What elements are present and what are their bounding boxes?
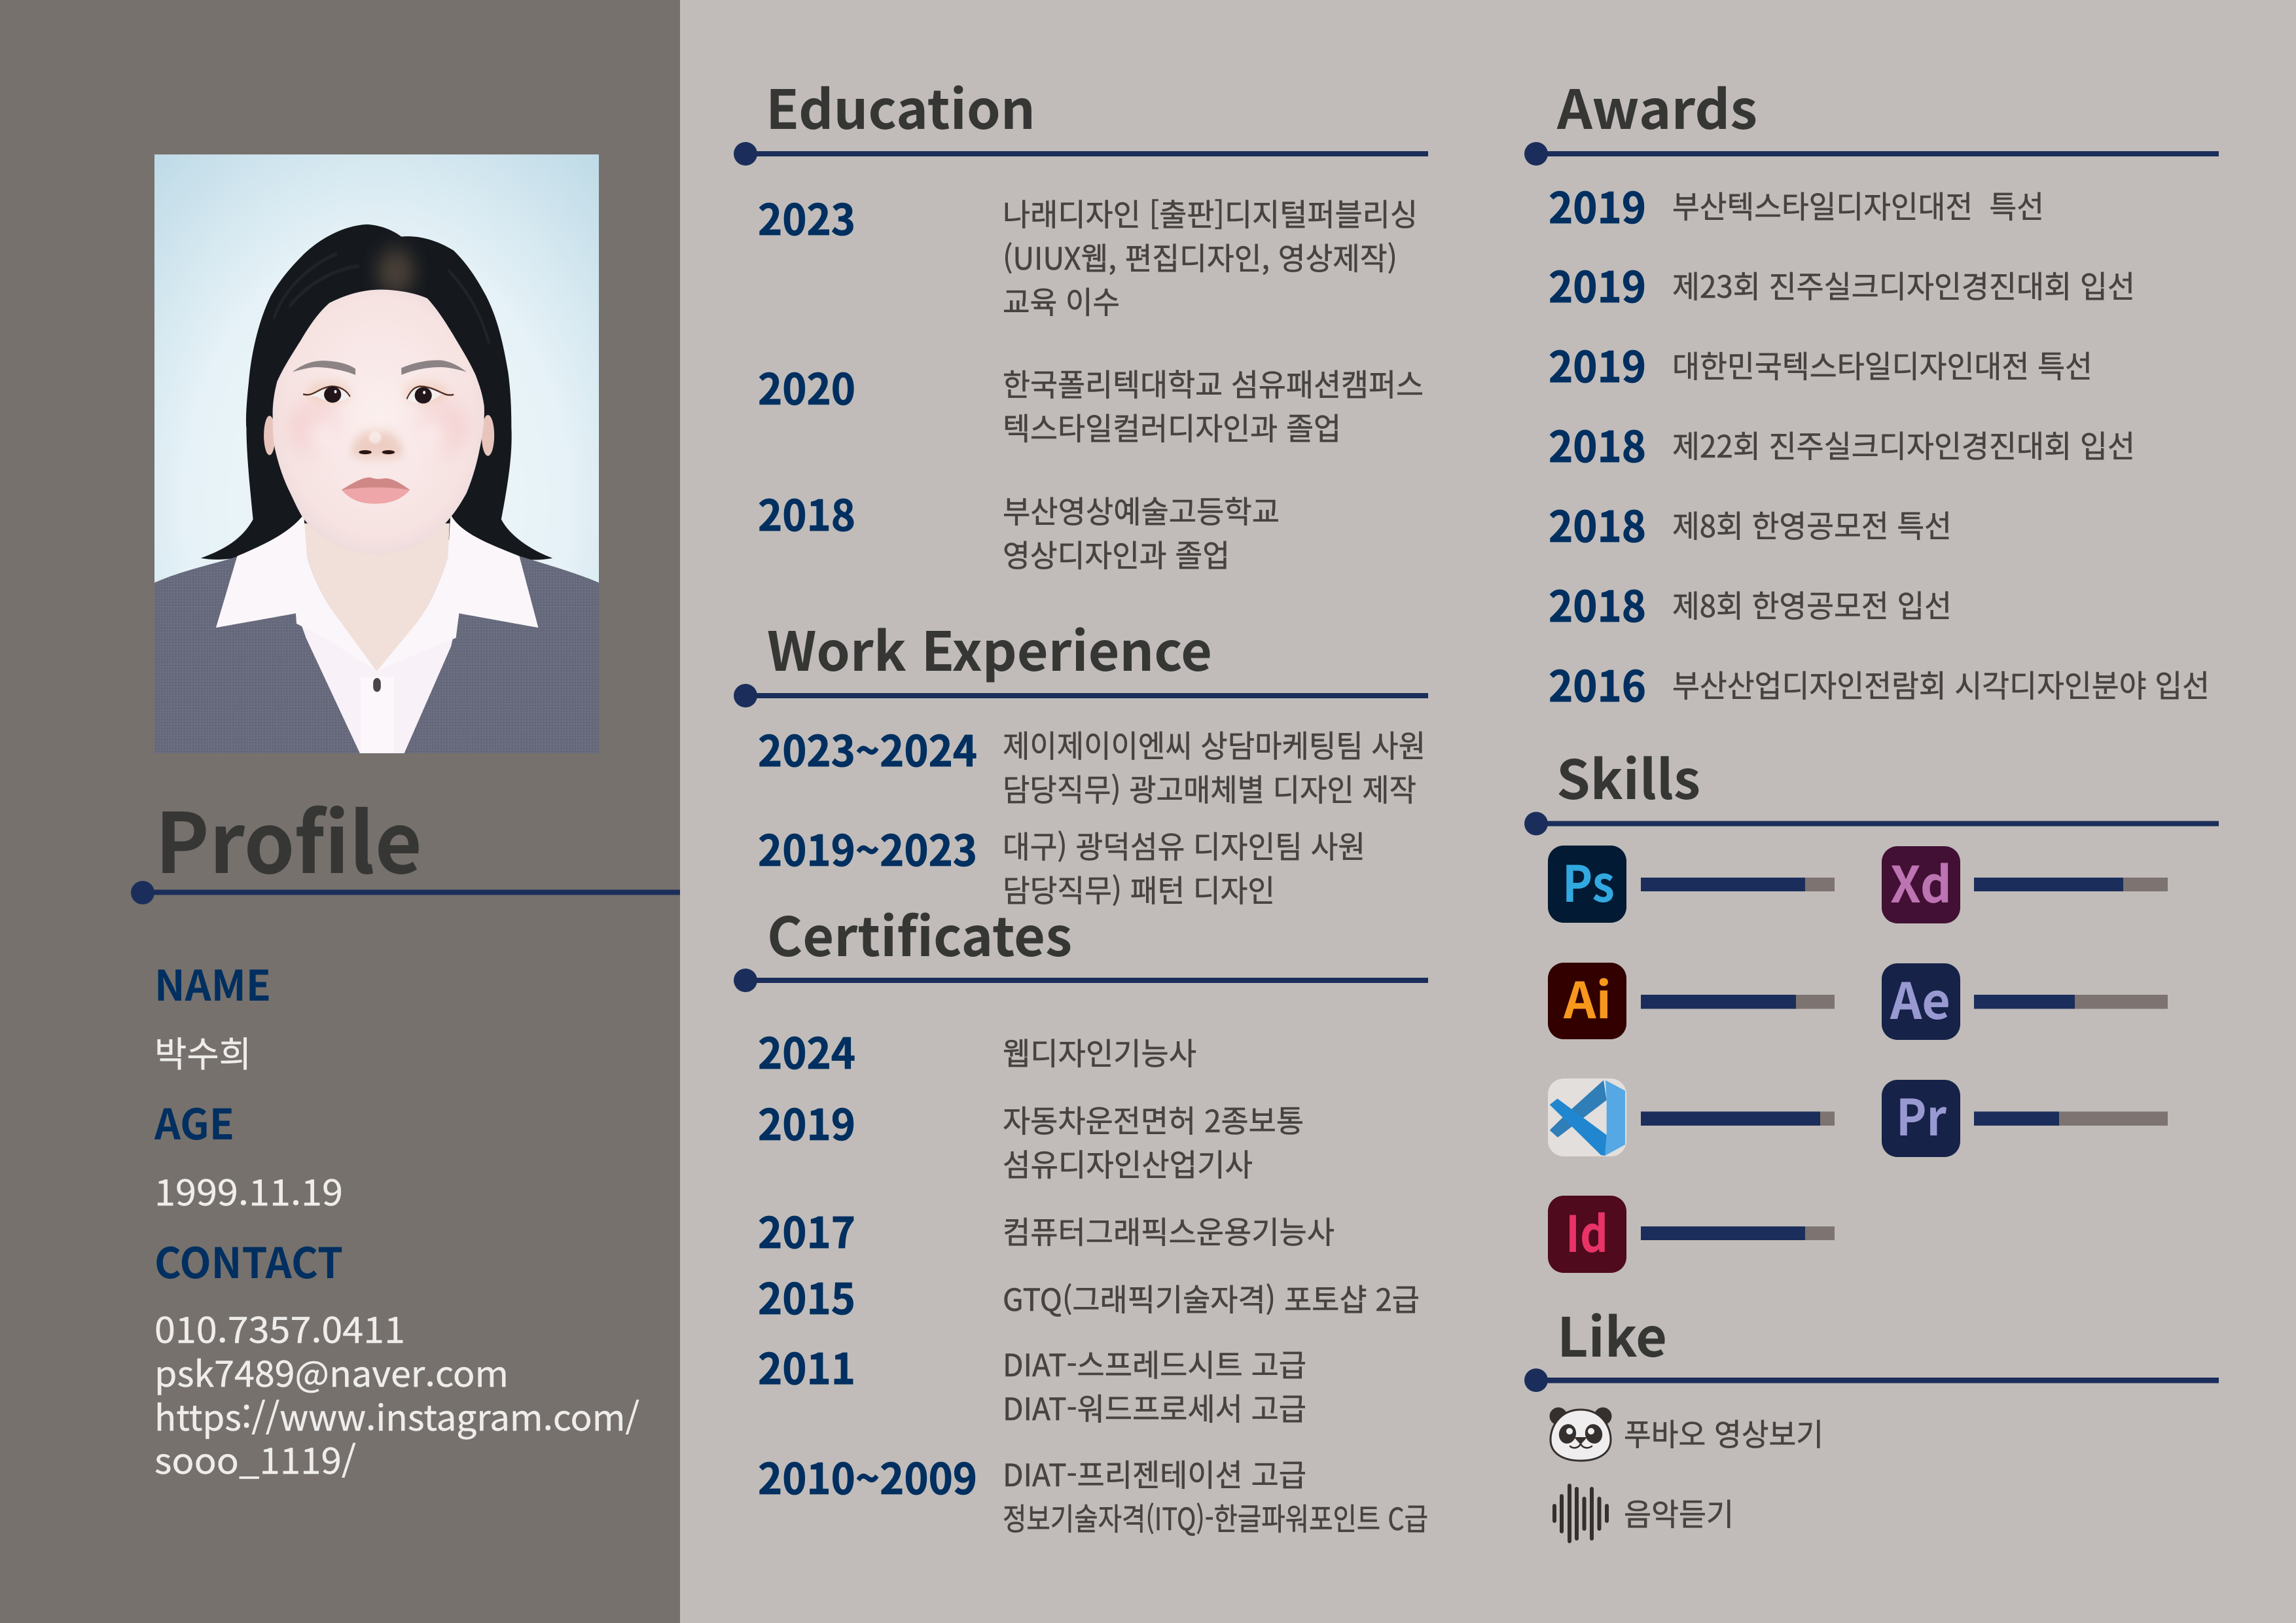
education entry 2023 (758, 186, 1418, 323)
award row 6: 제8회 한영공모전 입선 (1672, 581, 1952, 626)
awards heading: Awards (1556, 67, 1757, 145)
award row 6: 2018 (1549, 573, 1646, 634)
award row 4: 2018 (1549, 413, 1646, 474)
profile divider (131, 881, 680, 904)
like item: fubao videos: 푸바오 영상보기 (1624, 1410, 1823, 1455)
skill: Premiere: Pr (1896, 1078, 1947, 1150)
education entry 2020: 2020 (758, 355, 855, 417)
certificate 2010-2009: 2010~2009 (758, 1445, 977, 1507)
skill: Illustrator: Ai (1563, 961, 1611, 1033)
certificate 2024: 2024 (758, 1020, 855, 1081)
education heading: Education (766, 67, 1035, 145)
certificates heading: Certificates (767, 894, 1072, 972)
award row 2 (1549, 253, 2135, 315)
skills divider (1524, 812, 2219, 835)
certificate 2017 (758, 1199, 1335, 1260)
education entry 2023: 교육 이수 (1003, 277, 1120, 323)
award row 5: 제8회 한영공모전 특선 (1672, 501, 1952, 546)
education entry 2018 (758, 482, 1280, 576)
portrait photo (154, 154, 599, 753)
skills heading: Skills (1556, 737, 1700, 815)
contact details (154, 1302, 639, 1484)
work entry 2023-2024: 제이제이이엔씨 상담마케팅팀 사원 (1003, 721, 1426, 766)
certificate 2019 (758, 1091, 1304, 1185)
education entry 2023: 나래디자인 [출판]디지털퍼블리싱 (1003, 190, 1418, 235)
education entry 2018: 영상디자인과 졸업 (1003, 531, 1230, 576)
panel: skills (1524, 737, 2219, 1273)
award row 7: 2016 (1549, 652, 1646, 714)
certificate 2017: 컴퓨터그래픽스운용기능사 (1003, 1207, 1335, 1253)
certificate 2010-2009: 정보기술자격(ITQ)-한글파워포인트 C급 (1003, 1494, 1428, 1539)
work experience heading: Work Experience (767, 609, 1212, 687)
award row 1: 2019 (1549, 174, 1646, 236)
contact details: https://www.instagram.com/ (154, 1389, 639, 1441)
skill: After Effects: Ae (1890, 961, 1950, 1033)
certificate 2015: 2015 (758, 1265, 855, 1327)
age label: AGE (154, 1092, 234, 1152)
skill: Photoshop: Ps (1562, 844, 1615, 916)
name value: 박수희 (154, 1026, 251, 1077)
certificate 2011 (758, 1335, 1306, 1429)
work entry 2023-2024 (758, 717, 1426, 810)
award row 1 (1549, 174, 2044, 236)
work entry 2023-2024: 담당직무) 광고매체별 디자인 제작 (1003, 765, 1416, 810)
education entry 2023: (UIUX웹, 편집디자인, 영상제작) (1003, 234, 1397, 279)
profile heading: Profile (155, 777, 422, 897)
work entry 2019-2023: 담당직무) 패턴 디자인 (1003, 866, 1275, 911)
contact details: psk7489@naver.com (154, 1346, 509, 1397)
certificate 2019: 섬유디자인산업기사 (1003, 1140, 1253, 1185)
age value: 1999.11.19 (154, 1164, 343, 1216)
work entry 2023-2024: 2023~2024 (758, 717, 977, 779)
like heading: Like (1557, 1294, 1667, 1372)
education entry 2018: 2018 (758, 482, 855, 543)
skill: Premiere (1882, 1078, 2168, 1157)
award row 3: 2019 (1549, 333, 1646, 395)
contact details: 010.7357.0411 (154, 1302, 405, 1353)
work entry 2019-2023: 대구) 광덕섬유 디자인팀 사원 (1003, 822, 1365, 867)
award row 5 (1549, 493, 1952, 554)
panel: work experience (734, 609, 1428, 911)
certificate 2010-2009 (758, 1445, 1428, 1539)
education divider (734, 142, 1428, 166)
panel: awards (1524, 67, 2219, 714)
contact details: sooo_1119/ (154, 1433, 356, 1484)
panel: like (1524, 1294, 2219, 1543)
awards divider (1524, 142, 2219, 166)
skill: Illustrator (1548, 961, 1835, 1039)
education entry 2018: 부산영상예술고등학교 (1003, 487, 1280, 532)
certificate 2011: DIAT-워드프로세서 고급 (1003, 1384, 1306, 1429)
skill: Adobe XD: Xd (1890, 845, 1952, 917)
certificate 2011: DIAT-스프레드시트 고급 (1003, 1340, 1306, 1385)
education entry 2020: 한국폴리텍대학교 섬유패션캠퍼스 (1003, 360, 1424, 405)
skill: Adobe XD (1882, 845, 2168, 923)
award row 3: 대한민국텍스타일디자인대전 특선 (1672, 342, 2092, 387)
award row 1: 부산텍스타일디자인대전 특선 (1672, 182, 2044, 227)
certificate 2010-2009: DIAT-프리젠테이션 고급 (1003, 1450, 1306, 1495)
award row 4: 제22회 진주실크디자인경진대회 입선 (1672, 421, 2135, 467)
certificate 2015 (758, 1265, 1420, 1327)
certificate 2015: GTQ(그래픽기술자격) 포토샵 2급 (1003, 1275, 1420, 1320)
work entry 2019-2023 (758, 817, 1365, 911)
certificates divider (734, 969, 1428, 992)
award row 3 (1549, 333, 2092, 395)
certificate 2024: 웹디자인기능사 (1003, 1029, 1196, 1074)
award row 2: 2019 (1549, 253, 1646, 315)
award row 4 (1549, 413, 2135, 474)
icon: sound wave (1552, 1484, 1609, 1543)
award row 2: 제23회 진주실크디자인경진대회 입선 (1672, 262, 2135, 307)
work entry 2019-2023: 2019~2023 (758, 817, 977, 878)
work experience divider (734, 684, 1428, 707)
award row 5: 2018 (1549, 493, 1646, 554)
education entry 2023: 2023 (758, 186, 855, 247)
education entry 2020 (758, 355, 1424, 449)
skill: InDesign: Id (1566, 1194, 1608, 1266)
skill: Photoshop (1548, 844, 1835, 923)
skill: InDesign (1548, 1194, 1835, 1273)
like item: listening to music: 음악듣기 (1624, 1489, 1734, 1535)
panel: profile sidebar (0, 0, 680, 1623)
skill: VS Code (1548, 1079, 1835, 1156)
name label: NAME (154, 953, 271, 1013)
panel: certificates (734, 894, 1428, 1539)
award row 7 (1549, 652, 2210, 714)
education entry 2020: 텍스타일컬러디자인과 졸업 (1003, 404, 1341, 449)
skill: After Effects (1882, 961, 2168, 1040)
award row 7: 부산산업디자인전람회 시각디자인분야 입선 (1672, 661, 2210, 706)
panel: education (734, 67, 1428, 576)
certificate 2024 (758, 1020, 1196, 1081)
certificate 2011: 2011 (758, 1335, 855, 1397)
certificate 2017: 2017 (758, 1199, 855, 1260)
icon: panda (1550, 1407, 1611, 1461)
certificate 2019: 자동차운전면허 2종보통 (1003, 1096, 1304, 1141)
like divider (1524, 1368, 2219, 1392)
award row 6 (1549, 573, 1952, 634)
certificate 2019: 2019 (758, 1091, 855, 1152)
contact label: CONTACT (154, 1230, 343, 1291)
